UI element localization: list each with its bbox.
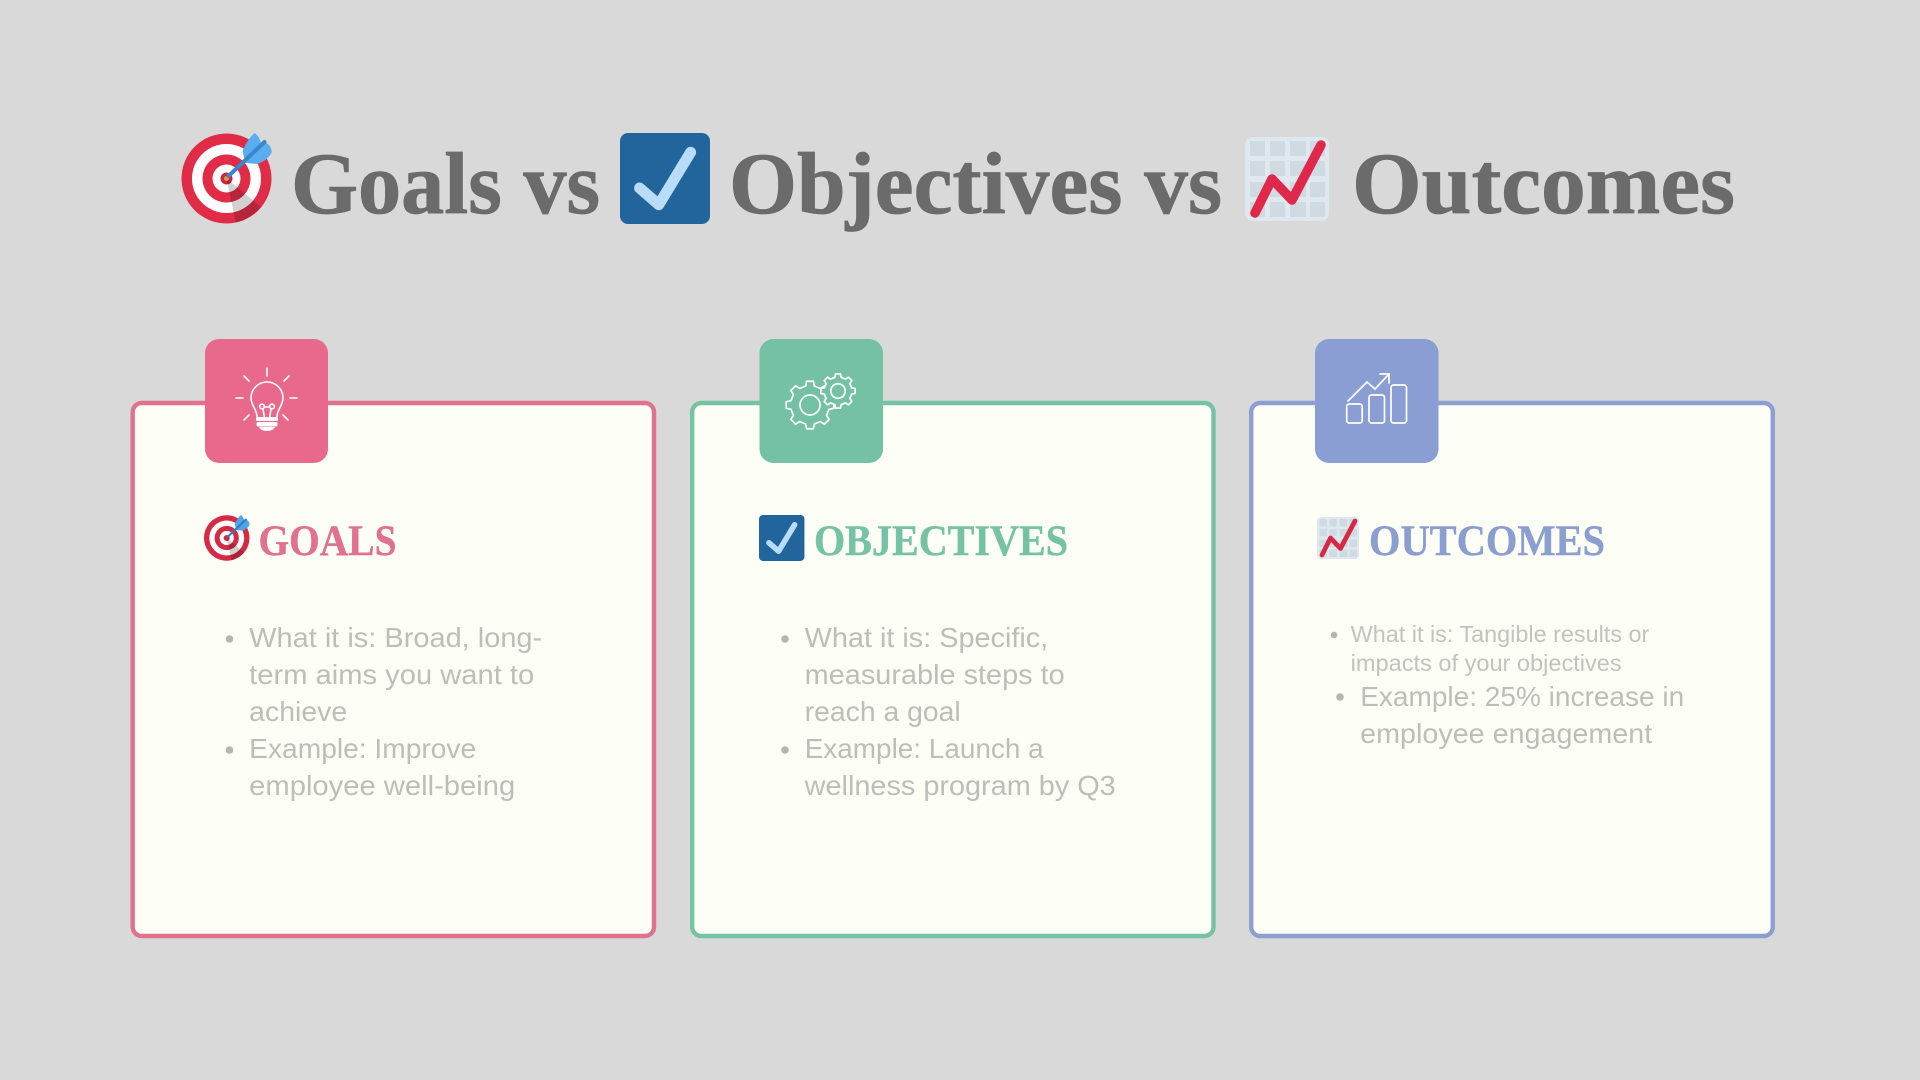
icon: target — [204, 515, 250, 561]
bullet list: objectives: reach a goal — [805, 696, 961, 727]
panel: outcomes — [1251, 339, 1773, 936]
bullet list: objectives: wellness program by Q3 — [804, 770, 1116, 801]
title word: Goals vs: Goals vs — [291, 136, 600, 233]
icon: rising chart — [1245, 137, 1329, 221]
title — [182, 133, 1735, 233]
title word: Objectives vs: Objectives vs — [729, 136, 1222, 233]
card frame — [1251, 403, 1773, 936]
bullet list: goals: What it is: Broad, long- — [249, 622, 542, 653]
bullet list: outcomes — [1331, 621, 1684, 749]
bullet list: outcomes: employee engagement — [1360, 718, 1652, 749]
icon: target with dart — [182, 133, 272, 224]
bullet list: goals: Example: Improve — [249, 733, 476, 764]
icon: check box — [759, 515, 804, 561]
bullet list: objectives: measurable steps to — [805, 659, 1065, 690]
bullet list: goals: employee well-being — [249, 770, 515, 801]
bullet list: goals — [226, 622, 542, 801]
bullet list: objectives — [781, 622, 1116, 801]
icon badge: light bulb — [205, 339, 328, 463]
icon: rising chart — [1317, 517, 1359, 559]
card frame — [133, 403, 654, 936]
panel: objectives — [692, 339, 1214, 936]
title word: Outcomes: Outcomes — [1352, 136, 1735, 233]
heading: objectives: OBJECTIVES — [814, 518, 1068, 565]
bullet list: objectives: What it is: Specific, — [805, 622, 1048, 653]
heading: goals: GOALS — [258, 518, 396, 565]
heading: outcomes: OUTCOMES — [1369, 518, 1605, 565]
bullet list: goals: term aims you want to — [249, 659, 534, 690]
bullet list: goals: achieve — [249, 696, 347, 727]
icon: check box — [620, 133, 710, 224]
icon badge: bar chart with arrow — [1315, 339, 1438, 463]
bullet list: outcomes: What it is: Tangible results or — [1351, 621, 1650, 647]
panel: goals — [133, 339, 654, 936]
bullet list: outcomes: Example: 25% increase in — [1360, 681, 1684, 712]
card frame — [692, 403, 1214, 936]
bullet list: objectives: Example: Launch a — [805, 733, 1044, 764]
bullet list: outcomes: impacts of your objectives — [1351, 650, 1622, 676]
icon badge: gears — [760, 339, 883, 463]
